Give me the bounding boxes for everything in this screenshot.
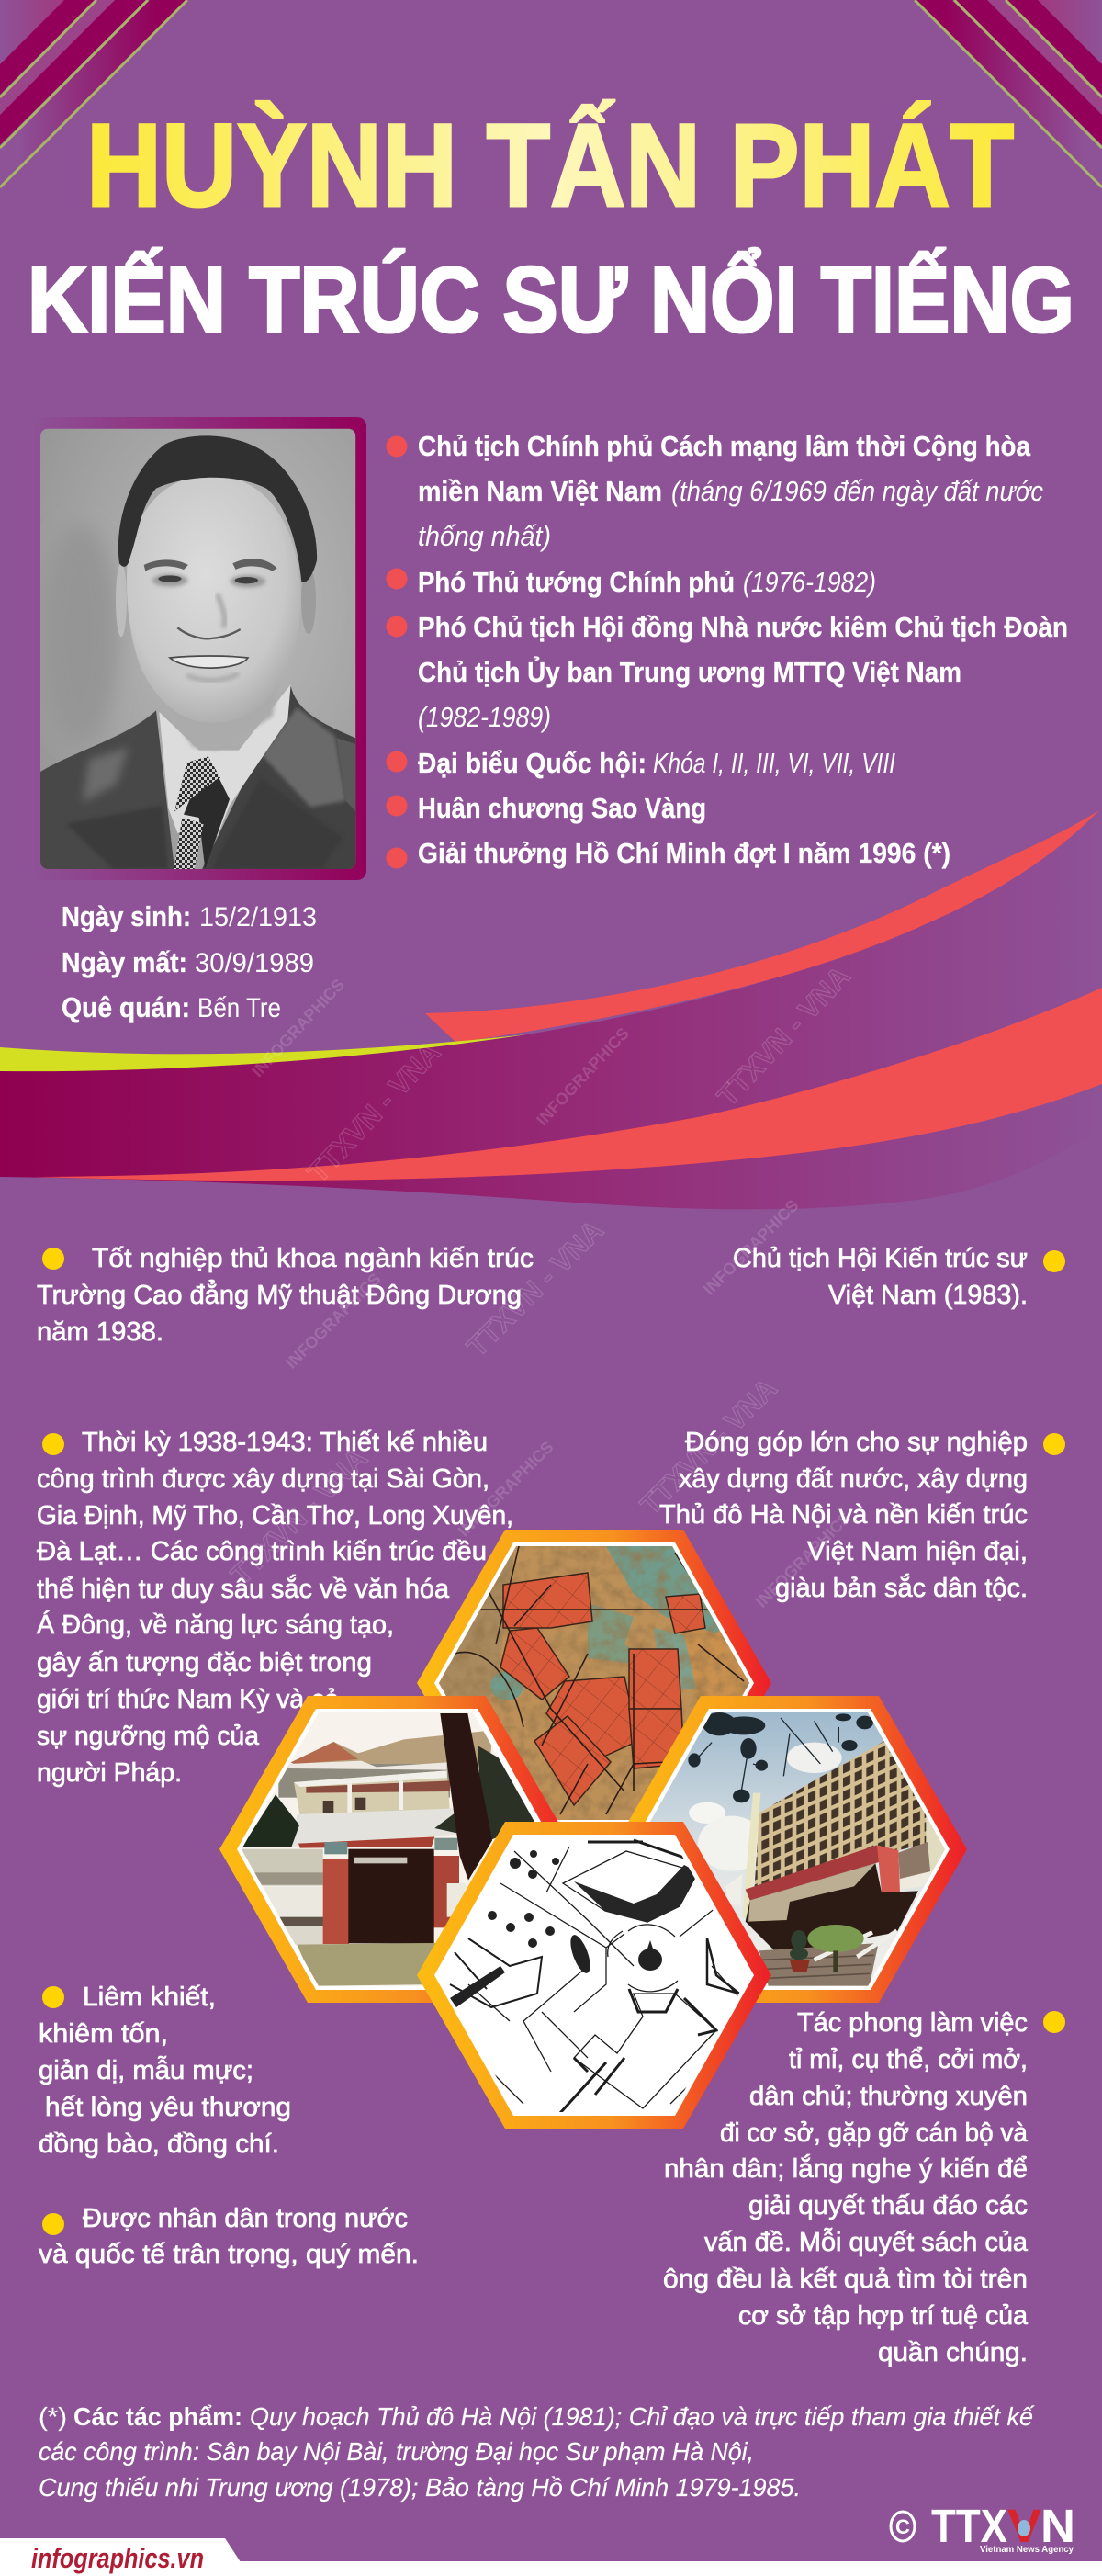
- mouth: [170, 656, 248, 668]
- text block: integrity: Liêm khiết,: [83, 1983, 216, 2012]
- ears: [116, 563, 127, 637]
- swoosh: upper red: [425, 810, 1099, 1043]
- text block: working style: ông đều là kết quả tìm tòi trên: [663, 2265, 1028, 2294]
- text block: 1938-1943 period: người Pháp.: [37, 1758, 182, 1788]
- biography facts: [62, 900, 317, 1023]
- hexagon photo: city map: [417, 1530, 771, 1836]
- text block: respected: [39, 2204, 419, 2269]
- portrait photo: [39, 429, 355, 869]
- footnote: Quy hoạch Thủ đô Hà Nội (1981); Chỉ đạo và trực tiếp tham gia thiết kế: [250, 2402, 1035, 2431]
- text block: 1938-1943 period: thể hiện tư duy sâu sắc về văn hóa: [37, 1574, 450, 1604]
- eyes: [158, 575, 182, 582]
- icon: copyright: [891, 2512, 915, 2541]
- text block: working style: [663, 2008, 1065, 2367]
- death date: Ngày mất:: [62, 946, 187, 978]
- item: gold star order: Huân chương Sao Vàng: [418, 792, 706, 824]
- watermarks: TTXVN - VNA: [711, 960, 856, 1113]
- bullets: red: [386, 435, 408, 869]
- text block: 1938-1943 period: công trình được xây dựng tại Sài Gòn,: [37, 1464, 489, 1494]
- text block: graduation: [37, 1244, 534, 1347]
- item: chairman: Chủ tịch Chính phủ Cách mạng lâm thời Cộng hòa: [418, 430, 1031, 462]
- text block: 1938-1943 period: giới trí thức Nam Kỳ và cả: [37, 1685, 340, 1714]
- portrait frame: [31, 417, 366, 880]
- text block: association chairman: Chủ tịch Hội Kiến trúc sư: [733, 1244, 1028, 1273]
- text block: contribution: Thủ đô Hà Nội và nền kiến trúc: [659, 1500, 1028, 1530]
- text block: contribution: [659, 1428, 1065, 1603]
- watermarks: INFOGRAPHICS: [282, 1270, 385, 1373]
- eye sockets: [152, 574, 265, 587]
- decorative swooshes: [0, 810, 1102, 1209]
- text block: contribution: Đóng góp lớn cho sự nghiệp: [685, 1428, 1028, 1457]
- item: deputy prime minister: (1976-1982): [743, 566, 876, 598]
- text block: working style: giải quyết thấu đáo các: [748, 2191, 1028, 2220]
- hexagon photo: architectural sketch: [417, 1822, 771, 2129]
- birth date: 15/2/1913: [199, 902, 317, 932]
- text block: integrity: hết lòng yêu thương: [45, 2093, 291, 2122]
- text block: working style: vấn đề. Mỗi quyết sách của: [704, 2227, 1029, 2257]
- watermarks: TTXVN - VNA: [460, 1214, 610, 1363]
- TTXVN wordmark: Vietnam News Agency: [980, 2545, 1074, 2555]
- footnote: các công trình: Sân bay Nội Bài, trường Đại học Sư phạm Hà Nội,: [39, 2437, 754, 2466]
- text block: association chairman: [733, 1244, 1065, 1310]
- item: chairman: miền Nam Việt Nam: [418, 475, 662, 507]
- title line 1: HUỲNH TẤN PHÁT: [86, 99, 1014, 232]
- text block: respected: Được nhân dân trong nước: [83, 2204, 408, 2233]
- item: vice chairman: (1982-1989): [418, 701, 551, 733]
- watermarks: INFOGRAPHICS: [533, 1024, 633, 1129]
- footnote: (*): [39, 2402, 67, 2431]
- swoosh: dark band: [0, 810, 1102, 1209]
- text block: 1938-1943 period: Thời kỳ 1938-1943: Thiết kế nhiều: [82, 1428, 488, 1457]
- corner stripes: top right: [914, 0, 1102, 187]
- text block: association chairman: Việt Nam (1983).: [828, 1281, 1028, 1310]
- text block: integrity: giản dị, mẫu mực;: [39, 2055, 253, 2085]
- item: vice chairman: Chủ tịch Ủy ban Trung ương MTTQ Việt Nam: [418, 655, 961, 688]
- watermarks: [224, 960, 856, 1611]
- copyright logo: [891, 2500, 1075, 2555]
- death date: [62, 946, 314, 978]
- tie: [174, 756, 220, 811]
- item: deputy prime minister: Phó Thủ tướng Chính phủ: [418, 566, 735, 598]
- birth date: [62, 900, 317, 932]
- suit: [40, 710, 174, 869]
- text block: working style: Tác phong làm việc: [797, 2008, 1028, 2038]
- hexagon photo: house: [219, 1696, 574, 2003]
- item: Ho Chi Minh prize: Giải thưởng Hồ Chí Minh đợt I năm 1996 (*): [418, 837, 950, 869]
- item: national assembly: Khóa I, II, III, VI, VII, VIII: [653, 747, 895, 779]
- hometown: Quê quán:: [62, 991, 190, 1023]
- hexagon photo: hotel: [613, 1696, 967, 2003]
- hair: [118, 435, 317, 582]
- footnote: [39, 2402, 1035, 2502]
- text block: working style: dân chủ; thường xuyên: [749, 2082, 1028, 2111]
- watermarks: INFOGRAPHICS: [700, 1196, 803, 1299]
- footnote: Cung thiếu nhi Trung ương (1978); Bảo tàng Hồ Chí Minh 1979-1985.: [39, 2473, 801, 2502]
- text block: integrity: khiêm tốn,: [39, 2019, 168, 2049]
- text block: graduation: Trường Cao đẳng Mỹ thuật Đông Dương: [37, 1279, 522, 1310]
- TTXVN wordmark: N: [1040, 2500, 1075, 2552]
- text block: working style: cơ sở tập hợp trí tuệ của: [738, 2301, 1029, 2331]
- text block: 1938-1943 period: gây ấn tượng đặc biệt trong: [37, 1648, 372, 1678]
- text block: working style: quần chúng.: [878, 2338, 1028, 2367]
- eyebrows: [144, 559, 188, 571]
- watermarks: TTXVN - VNA: [224, 1441, 374, 1591]
- text block: 1938-1943 period: Á Đông, về năng lực sáng tạo,: [37, 1610, 394, 1640]
- TTXVN wordmark: V: [1007, 2500, 1041, 2552]
- shirt: [159, 684, 291, 836]
- text block: 1938-1943 period: [37, 1428, 513, 1788]
- swoosh: lower red: [35, 988, 1102, 1181]
- text block: graduation: năm 1938.: [37, 1317, 163, 1347]
- nose: [177, 627, 241, 638]
- text block: contribution: giàu bản sắc dân tộc.: [775, 1573, 1028, 1603]
- icon: copyright: C: [895, 2515, 910, 2538]
- text block: 1938-1943 period: Đà Lạt… Các công trình kiến trúc đều: [37, 1537, 487, 1566]
- item: chairman: thống nhất): [418, 520, 551, 552]
- watermarks: TTXVN - VNA: [301, 1036, 446, 1189]
- text block: working style: nhân dân; lắng nghe ý kiến để: [664, 2153, 1028, 2184]
- footnote: Các tác phẩm:: [73, 2402, 242, 2431]
- item: chairman: [418, 430, 1043, 552]
- text block: graduation: Tốt nghiệp thủ khoa ngành kiến trúc: [92, 1244, 534, 1273]
- item: chairman: (tháng 6/1969 đến ngày đất nước: [671, 475, 1043, 507]
- birth date: Ngày sinh:: [62, 900, 191, 932]
- watermarks: INFOGRAPHICS: [455, 1438, 557, 1541]
- text block: working style: tỉ mỉ, cụ thể, cởi mở,: [789, 2045, 1028, 2074]
- TTXVN wordmark: TTX: [931, 2500, 1007, 2552]
- item: national assembly: [418, 747, 895, 779]
- hometown: [62, 991, 281, 1023]
- swoosh: lime: [0, 1034, 527, 1071]
- text block: integrity: [39, 1983, 291, 2159]
- TTXVN wordmark: [931, 2500, 1075, 2555]
- watermarks: TTXVN - VNA: [634, 1372, 783, 1521]
- text block: working style: đi cơ sở, gặp gỡ cán bộ và: [720, 2118, 1029, 2148]
- neck: [183, 702, 277, 751]
- title: [28, 99, 1074, 352]
- career list: [386, 430, 1068, 869]
- hometown: Bến Tre: [197, 993, 281, 1023]
- item: vice chairman: [418, 611, 1068, 733]
- text block: integrity: đồng bào, đồng chí.: [39, 2130, 279, 2159]
- item: national assembly: Đại biểu Quốc hội:: [418, 747, 647, 779]
- face: [127, 475, 301, 723]
- death date: 30/9/1989: [195, 948, 314, 978]
- watermarks: INFOGRAPHICS: [752, 1508, 855, 1611]
- text block: 1938-1943 period: sự ngưỡng mộ của: [37, 1722, 260, 1751]
- text block: respected: và quốc tế trân trọng, quý mến.: [39, 2240, 419, 2269]
- source label: infographics.vn: [31, 2542, 204, 2574]
- watermarks: INFOGRAPHICS: [248, 976, 348, 1080]
- text block: 1938-1943 period: Gia Định, Mỹ Tho, Cần Thơ, Long Xuyên,: [37, 1501, 513, 1531]
- text block: contribution: Việt Nam hiện đại,: [807, 1537, 1028, 1566]
- text block: contribution: xây dựng đất nước, xây dựng: [679, 1464, 1028, 1494]
- corner stripes: top left: [0, 0, 188, 187]
- footer: [0, 2538, 1102, 2576]
